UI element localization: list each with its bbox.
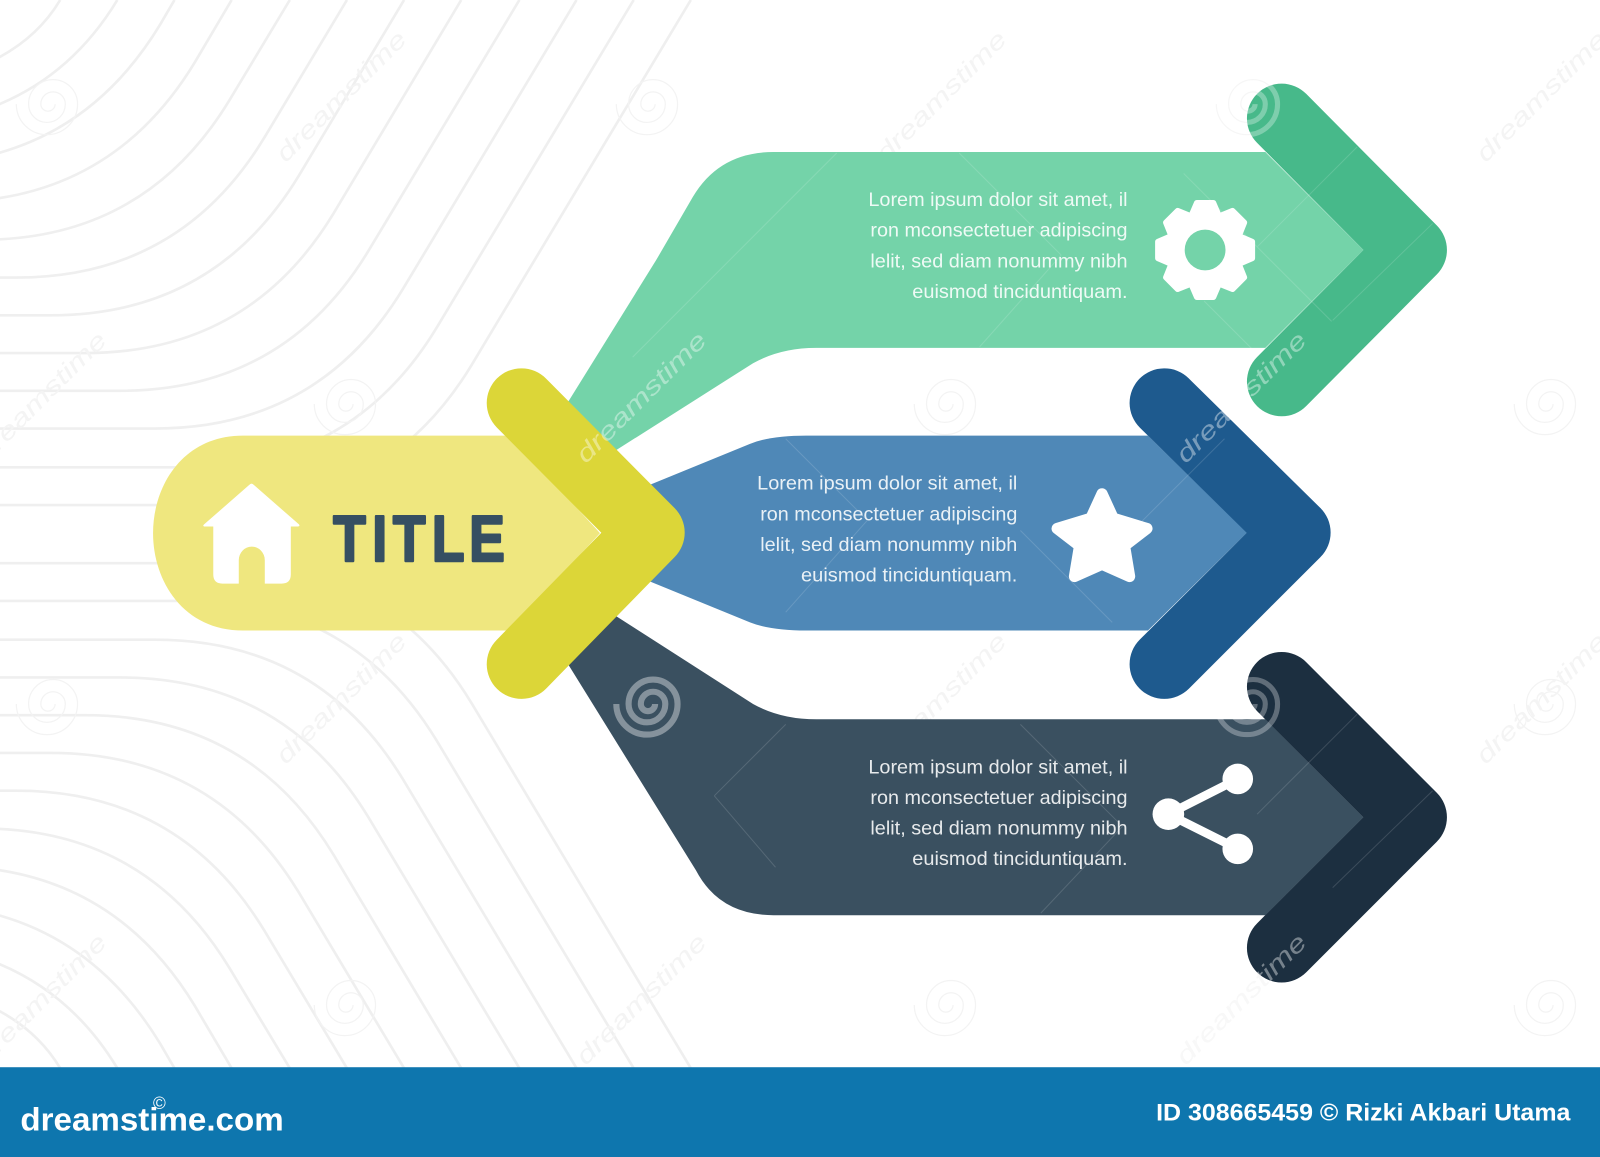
yellow arrow body	[153, 436, 600, 631]
icon: house	[203, 484, 299, 584]
icon: share	[1153, 764, 1253, 864]
dark arrow chevron head	[1282, 687, 1412, 948]
green arrow text: euismod tinciduntiquam.	[912, 281, 1128, 303]
dark arrow text: ron mconsectetuer adipiscing	[870, 787, 1128, 809]
blue arrow text: Lorem ipsum dolor sit amet, il	[757, 473, 1017, 495]
panel: green arrow	[559, 118, 1412, 459]
blue arrow text: euismod tinciduntiquam.	[801, 565, 1017, 587]
icon: star	[1057, 494, 1147, 576]
blue arrow text	[757, 473, 1017, 587]
watermark text on background: dreamstime	[1171, 929, 1313, 1071]
watermark overlay on arrows: dreamstime	[1171, 929, 1313, 1071]
panel: dark arrow	[559, 607, 1412, 948]
panel: blue arrow	[633, 403, 1296, 664]
dark arrow text: euismod tinciduntiquam.	[912, 848, 1128, 870]
watermark text on background: dreamstime	[271, 26, 413, 168]
green arrow text: ron mconsectetuer adipiscing	[870, 220, 1128, 242]
watermark overlay on arrows: dreamstime	[571, 327, 713, 469]
watermark text on background: dreamstime	[571, 929, 713, 1071]
dark arrow text	[868, 756, 1128, 870]
green arrow text	[868, 189, 1128, 303]
watermark text on background: dreamstime	[271, 628, 413, 770]
footer credit: ID 308665459 © Rizki Akbari Utama	[1156, 1099, 1571, 1126]
icon: gear	[1158, 203, 1252, 297]
blue arrow body	[633, 436, 1247, 631]
watermark overlay on arrows: dreamstime	[1171, 327, 1313, 469]
watermark text on background: dreamstime	[871, 26, 1013, 168]
blue arrow text: lelit, sed diam nonummy nibh	[760, 534, 1017, 556]
watermark text on background: dreamstime	[1471, 628, 1600, 770]
yellow arrow chevron head	[521, 403, 650, 664]
green arrow text: Lorem ipsum dolor sit amet, il	[868, 189, 1128, 211]
blue arrow chevron head	[1164, 403, 1296, 664]
footer logo: dreamstime.com	[20, 1100, 284, 1137]
dark arrow text: Lorem ipsum dolor sit amet, il	[868, 756, 1128, 778]
green arrow body	[559, 152, 1363, 459]
green arrow chevron head	[1282, 118, 1412, 382]
green arrow text: lelit, sed diam nonummy nibh	[870, 250, 1128, 272]
panel: yellow title arrow	[153, 403, 650, 664]
title: TITLE	[333, 502, 505, 575]
watermark text on background: dreamstime	[1471, 26, 1600, 168]
blue arrow text: ron mconsectetuer adipiscing	[760, 503, 1017, 525]
footer bar	[0, 1067, 1600, 1157]
watermark overlay on arrows	[571, 80, 1433, 1071]
dark arrow body	[559, 607, 1363, 915]
dark arrow text: lelit, sed diam nonummy nibh	[870, 818, 1128, 840]
footer logo: ©	[153, 1093, 166, 1113]
watermark text on background: dreamstime	[871, 628, 1013, 770]
